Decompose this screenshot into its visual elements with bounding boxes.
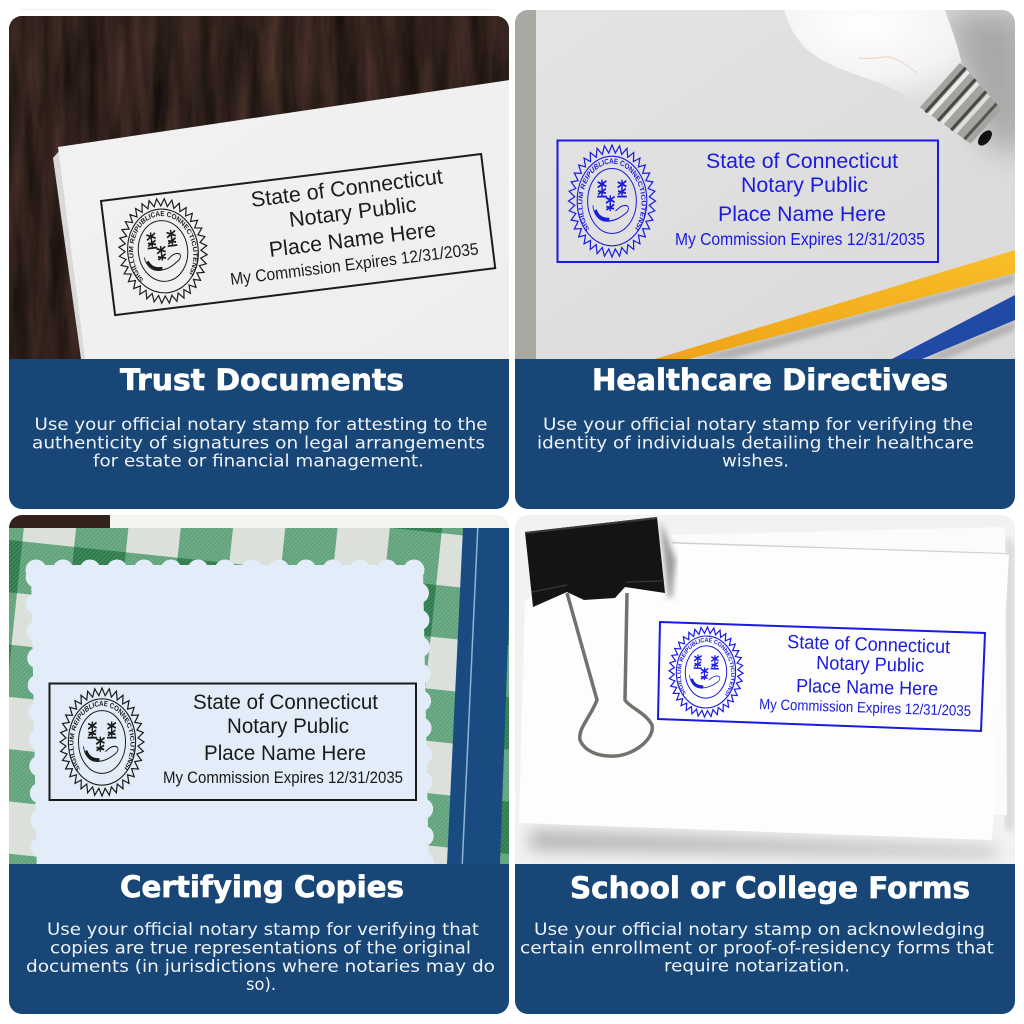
caption box xyxy=(515,359,1015,509)
photo: document on dark wood xyxy=(9,16,510,366)
heading: Certifying Copies xyxy=(120,870,404,904)
stamp impression: black flat xyxy=(48,682,417,801)
stamp impression: blue: My Commission Expires 12/31/2035 xyxy=(675,229,925,249)
stamp impression: blue: State of Connecticut xyxy=(706,149,898,173)
stamp impression: black flat: My Commission Expires 12/31/2035 xyxy=(163,768,403,787)
caption box xyxy=(9,864,509,1014)
description: Use your official notary stamp on acknowledging xyxy=(534,920,985,940)
decorative top hairline xyxy=(20,9,495,10)
photo: papers held with binder clip xyxy=(515,515,1015,875)
stamp impression: blue tilted: Notary Public xyxy=(816,653,924,677)
stamp impression: black flat: SIGILLUM REIPUBLICAE CONNECTICUTENSIS xyxy=(69,700,135,772)
description xyxy=(520,920,994,976)
stamp impression: blue tilted: My Commission Expires 12/31/2035 xyxy=(759,696,971,720)
stamp impression: black tilted: My Commission Expires 12/31/2035 xyxy=(229,239,480,289)
description: Use your official notary stamp for verifying that xyxy=(47,920,479,940)
stamp impression: blue: SIGILLUM REIPUBLICAE CONNECTICUTENSIS xyxy=(578,158,646,232)
stamp impression: black tilted: SIGILLUM REIPUBLICAE CONNECTICUTENSIS xyxy=(128,211,198,282)
heading: Healthcare Directives xyxy=(592,363,948,397)
description: certain enrollment or proof-of-residency forms that xyxy=(520,938,994,958)
panel: certifying copies xyxy=(9,515,509,1014)
photo: paper with light bulb and pencils xyxy=(515,10,1024,360)
description xyxy=(537,415,974,472)
stamp impression: blue tilted xyxy=(656,621,986,732)
description: Use your official notary stamp for verifying the xyxy=(543,415,973,435)
caption box xyxy=(515,864,1015,1014)
stamp impression: black tilted xyxy=(100,152,496,316)
description xyxy=(26,920,495,995)
stamp impression: blue xyxy=(556,140,939,263)
description: Use your official notary stamp for attesting to the xyxy=(34,415,487,435)
stamp impression: black flat: Notary Public xyxy=(227,715,349,738)
panel: school or college forms xyxy=(515,515,1015,1014)
stamp impression: black tilted: Notary Public xyxy=(288,192,418,232)
heading: Trust Documents xyxy=(120,363,404,397)
photo: scalloped card on gingham cloth xyxy=(9,515,512,880)
description: wishes. xyxy=(722,452,789,472)
description xyxy=(32,415,487,472)
description: for estate or financial management. xyxy=(93,452,424,472)
stamp impression: black tilted: Place Name Here xyxy=(268,218,437,262)
description: authenticity of signatures on legal arrangements xyxy=(32,434,485,454)
description: so). xyxy=(246,975,276,995)
stamp impression: blue: Place Name Here xyxy=(718,202,886,226)
heading: School or College Forms xyxy=(570,871,970,905)
description: identity of individuals detailing their healthcare xyxy=(537,434,974,454)
stamp impression: blue: Notary Public xyxy=(741,173,868,197)
stamp impression: blue tilted: Place Name Here xyxy=(796,676,938,700)
stamp impression: black flat: Place Name Here xyxy=(204,742,366,765)
panel: healthcare directives xyxy=(515,10,1015,509)
description: documents (in jurisdictions where notaries may do xyxy=(26,957,495,977)
description: copies are true representations of the original xyxy=(50,938,471,958)
caption box xyxy=(9,359,509,509)
stamp impression: black flat: State of Connecticut xyxy=(193,691,378,714)
stamp impression: blue tilted: SIGILLUM REIPUBLICAE CONNECTICUTENSIS xyxy=(677,638,735,697)
panel: trust documents xyxy=(9,16,509,509)
stamp impression: blue tilted: State of Connecticut xyxy=(787,632,951,658)
stamp impression: black tilted: State of Connecticut xyxy=(250,164,444,212)
description: require notarization. xyxy=(664,956,850,976)
